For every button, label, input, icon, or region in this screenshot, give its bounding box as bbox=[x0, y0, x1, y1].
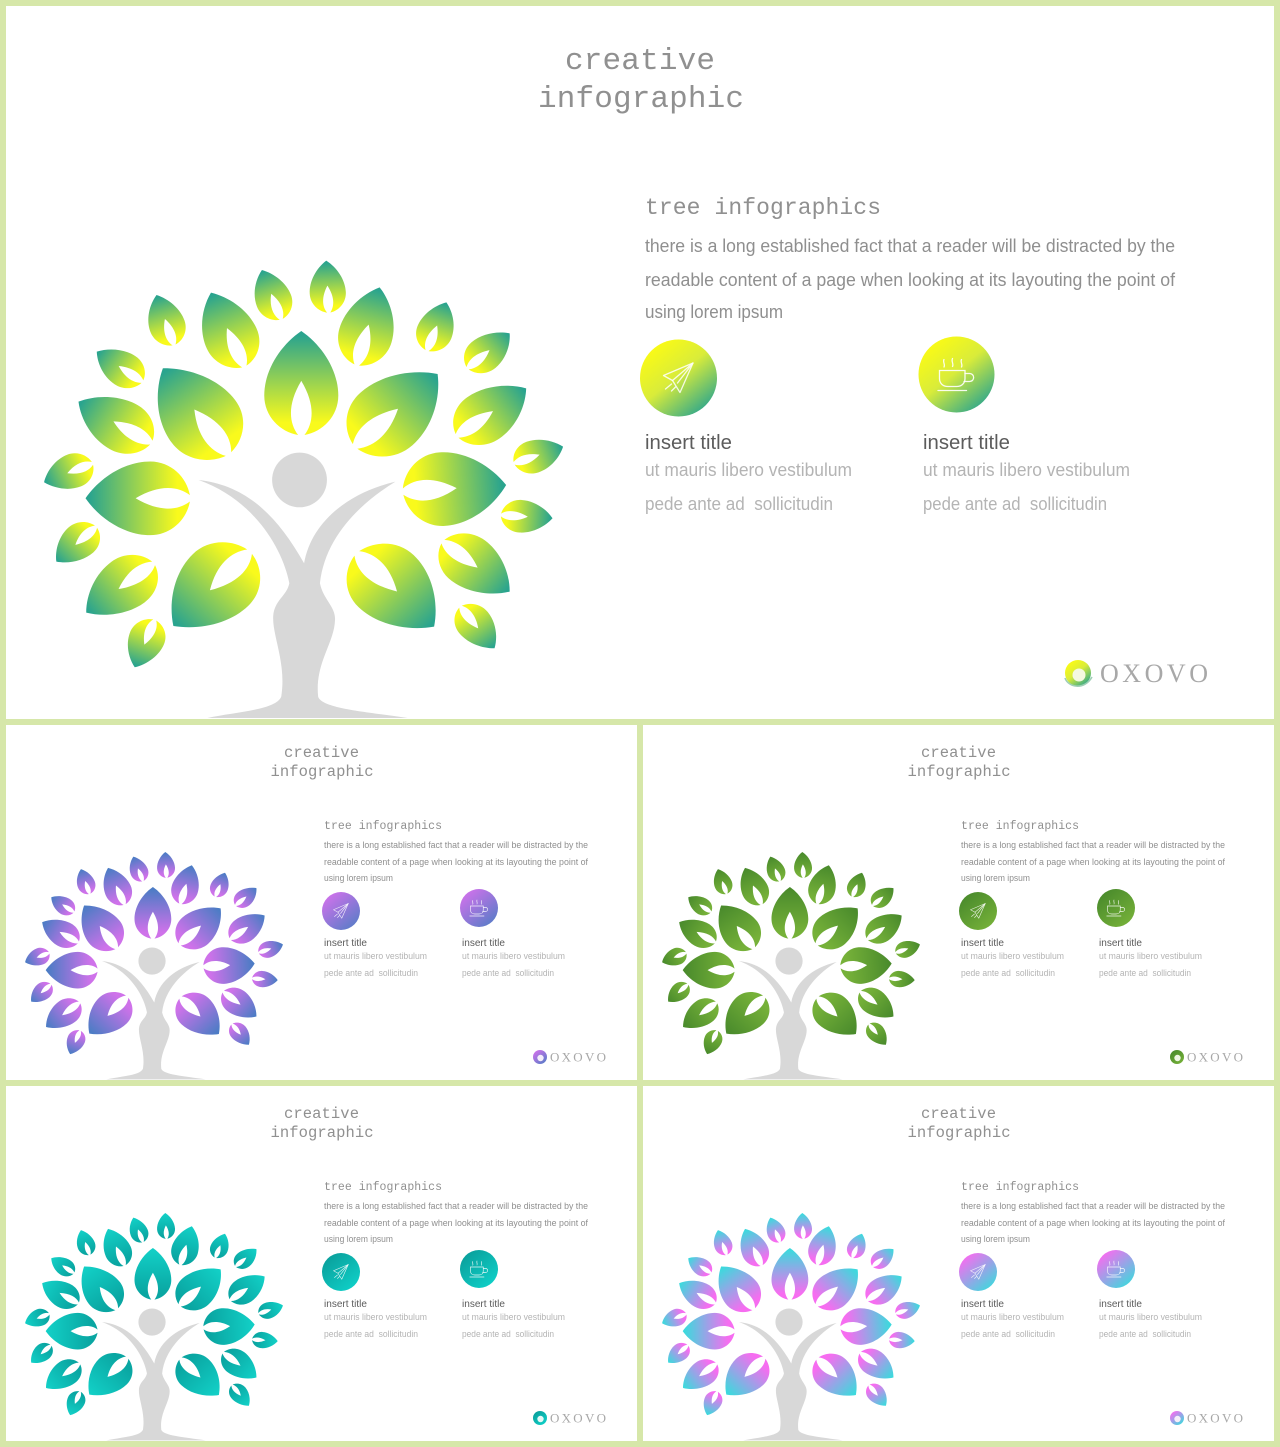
title: creative bbox=[921, 744, 996, 762]
item 2 text bbox=[1099, 1299, 1202, 1339]
title: infographic bbox=[270, 1124, 374, 1142]
item 2 text: ut mauris libero vestibulum bbox=[1099, 951, 1202, 961]
leaves bbox=[659, 852, 923, 1057]
tree illustration bbox=[659, 852, 923, 1079]
trunk and head bbox=[739, 947, 843, 1079]
description text: using lorem ipsum bbox=[645, 302, 783, 322]
description text: there is a long established fact that a reader will be distracted by the bbox=[961, 1201, 1225, 1211]
item 2 text: pede ante ad sollicitudin bbox=[1099, 1329, 1191, 1339]
item 2 text: insert title bbox=[1099, 938, 1142, 949]
item 2 text bbox=[462, 1299, 565, 1339]
description text bbox=[961, 840, 1226, 883]
item 1 text bbox=[324, 938, 427, 978]
item 2 text: ut mauris libero vestibulum bbox=[923, 460, 1130, 480]
trunk and head bbox=[102, 947, 206, 1079]
logo: OXOVO bbox=[1187, 1410, 1243, 1426]
tree illustration bbox=[37, 260, 569, 718]
item 2 text: insert title bbox=[462, 1299, 505, 1310]
logo: OXOVO bbox=[550, 1410, 606, 1426]
item 1 text bbox=[645, 432, 852, 514]
item 2 text bbox=[923, 432, 1130, 514]
panel: green slide bbox=[643, 725, 1274, 1080]
title: infographic bbox=[908, 1124, 1010, 1142]
description text: readable content of a page when looking at its layouting the point of bbox=[324, 1218, 589, 1228]
item 2 text: pede ante ad sollicitudin bbox=[462, 1329, 554, 1339]
item 1 text: pede ante ad sollicitudin bbox=[961, 968, 1055, 978]
item 2 text: insert title bbox=[1099, 1299, 1142, 1310]
item 1 text: ut mauris libero vestibulum bbox=[961, 951, 1064, 961]
trunk and head bbox=[199, 453, 408, 718]
item 2 text: ut mauris libero vestibulum bbox=[1099, 1312, 1202, 1322]
title bbox=[908, 1105, 1010, 1142]
heading: tree infographics bbox=[961, 820, 1079, 833]
description text: readable content of a page when looking at its layouting the point of bbox=[324, 857, 589, 867]
item 1 text: ut mauris libero vestibulum bbox=[324, 951, 427, 961]
panel: teal slide bbox=[6, 1086, 637, 1441]
slide background bbox=[6, 6, 1274, 719]
title: creative bbox=[565, 44, 715, 79]
icon: paper plane bbox=[959, 892, 997, 930]
icon: paper plane bbox=[322, 892, 360, 930]
heading: tree infographics bbox=[324, 820, 442, 833]
slide background bbox=[6, 1086, 637, 1441]
heading: tree infographics: tree infographics bbox=[645, 195, 881, 221]
item 1 text: ut mauris libero vestibulum bbox=[324, 1312, 427, 1322]
item 1 text: insert title bbox=[645, 432, 732, 454]
leaves bbox=[22, 852, 286, 1057]
icon: coffee cup bbox=[918, 336, 994, 412]
slide background bbox=[643, 1086, 1274, 1441]
description text: using lorem ipsum bbox=[961, 873, 1030, 883]
item 1 text bbox=[961, 938, 1064, 978]
item 2 text: ut mauris libero vestibulum bbox=[462, 951, 565, 961]
logo: OXOVO bbox=[550, 1050, 606, 1064]
description text: there is a long established fact that a reader will be distracted by the bbox=[645, 236, 1175, 256]
panel: purple slide bbox=[6, 725, 637, 1080]
description text: there is a long established fact that a reader will be distracted by the bbox=[324, 1201, 588, 1211]
icon: paper plane bbox=[959, 1253, 997, 1291]
title bbox=[538, 44, 744, 117]
description text: there is a long established fact that a reader will be distracted by the bbox=[961, 840, 1225, 850]
description text: readable content of a page when looking at its layouting the point of bbox=[961, 857, 1226, 867]
slide background bbox=[6, 725, 637, 1080]
title: infographic bbox=[538, 82, 744, 117]
icon: coffee cup bbox=[460, 889, 498, 927]
icon: coffee cup bbox=[460, 1250, 498, 1288]
item 1 text: pede ante ad sollicitudin bbox=[645, 494, 833, 514]
description text: using lorem ipsum bbox=[961, 1234, 1030, 1244]
title: creative bbox=[921, 1105, 996, 1123]
title: infographic bbox=[270, 763, 374, 781]
panel: main yellow-green slide bbox=[6, 6, 1274, 719]
item 1 text: ut mauris libero vestibulum bbox=[961, 1312, 1064, 1322]
icon: coffee cup bbox=[1097, 889, 1135, 927]
item 2 text: ut mauris libero vestibulum bbox=[462, 1312, 565, 1322]
title bbox=[270, 744, 374, 781]
item 1 text: pede ante ad sollicitudin bbox=[961, 1329, 1055, 1339]
heading: tree infographics bbox=[324, 1181, 442, 1194]
logo: OXOVO bbox=[1100, 659, 1208, 688]
title: creative bbox=[284, 1105, 359, 1123]
tree illustration bbox=[22, 852, 286, 1079]
description text: using lorem ipsum bbox=[324, 1234, 393, 1244]
description text bbox=[961, 1201, 1226, 1244]
tree illustration bbox=[659, 1213, 923, 1440]
panel: pink-cyan slide bbox=[643, 1086, 1274, 1441]
leaves bbox=[37, 260, 569, 674]
item 2 text: insert title bbox=[923, 432, 1010, 454]
slide background bbox=[643, 725, 1274, 1080]
description text: there is a long established fact that a reader will be distracted by the bbox=[324, 840, 588, 850]
trunk and head bbox=[102, 1308, 206, 1440]
title bbox=[270, 1105, 374, 1142]
item 2 text: pede ante ad sollicitudin bbox=[1099, 968, 1191, 978]
item 1 text: insert title bbox=[961, 938, 1004, 949]
title: infographic bbox=[908, 763, 1010, 781]
heading: tree infographics bbox=[961, 1181, 1079, 1194]
description text bbox=[324, 1201, 589, 1244]
icon: coffee cup bbox=[1097, 1250, 1135, 1288]
description text bbox=[645, 236, 1176, 322]
item 1 text: pede ante ad sollicitudin bbox=[324, 968, 418, 978]
icon: paper plane bbox=[640, 340, 717, 416]
tree illustration bbox=[22, 1213, 286, 1440]
description text: readable content of a page when looking at its layouting the point of bbox=[961, 1218, 1226, 1228]
item 2 text: insert title bbox=[462, 938, 505, 949]
leaves bbox=[659, 1213, 923, 1418]
title: creative bbox=[284, 744, 359, 762]
leaves bbox=[22, 1213, 286, 1418]
item 1 text: insert title bbox=[961, 1299, 1004, 1310]
item 1 text: pede ante ad sollicitudin bbox=[324, 1329, 418, 1339]
item 1 text: insert title bbox=[324, 938, 367, 949]
trunk and head bbox=[739, 1308, 843, 1440]
item 2 text bbox=[1099, 938, 1202, 978]
description text: using lorem ipsum bbox=[324, 873, 393, 883]
item 1 text bbox=[324, 1299, 427, 1339]
description text: readable content of a page when looking at its layouting the point of bbox=[645, 270, 1176, 290]
title bbox=[908, 744, 1010, 781]
icon: paper plane bbox=[322, 1253, 360, 1291]
item 2 text bbox=[462, 938, 565, 978]
item 2 text: pede ante ad sollicitudin bbox=[462, 968, 554, 978]
item 1 text bbox=[961, 1299, 1064, 1339]
item 2 text: pede ante ad sollicitudin bbox=[923, 494, 1107, 514]
logo: OXOVO bbox=[1187, 1050, 1243, 1064]
item 1 text: ut mauris libero vestibulum bbox=[645, 460, 852, 480]
item 1 text: insert title bbox=[324, 1299, 367, 1310]
description text bbox=[324, 840, 589, 883]
